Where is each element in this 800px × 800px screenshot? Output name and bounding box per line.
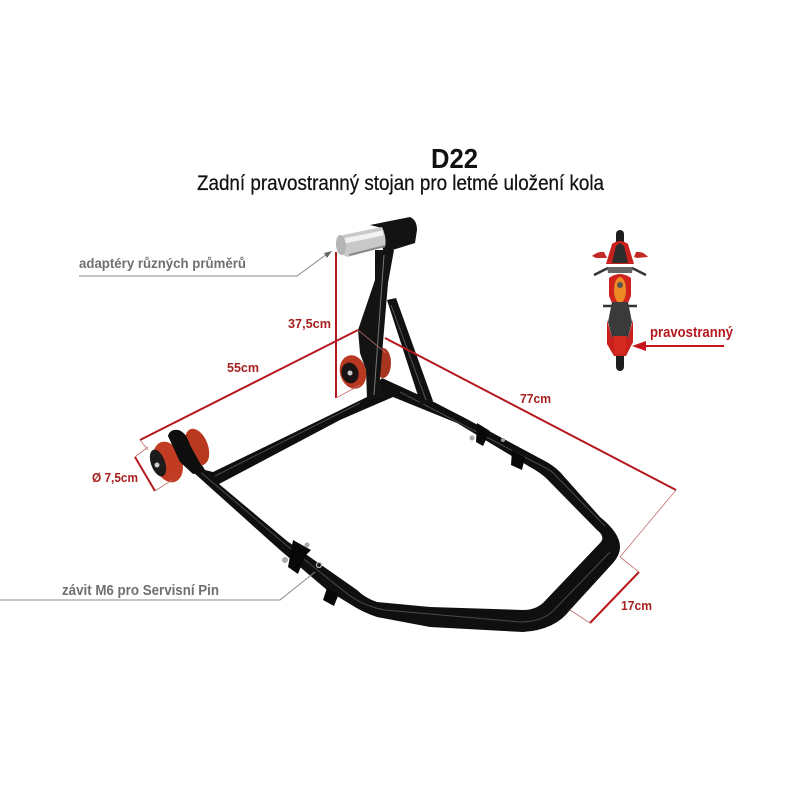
dimension: 17cm — [570, 557, 652, 623]
dimension: wheel diameter 7,5cm: Ø 7,5cm — [92, 471, 138, 485]
axle holder cylinder — [370, 217, 417, 253]
dimension: height 37,5cm — [288, 252, 360, 398]
dimension: length 77cm: 77cm — [520, 392, 551, 406]
callout: adapters — [79, 251, 332, 276]
upright post and strut — [358, 250, 433, 405]
dimension: width 55cm — [140, 330, 386, 450]
callout: M6 thread — [0, 572, 315, 600]
stand product image — [147, 217, 620, 632]
callout: M6 thread: závit M6 pro Servisní Pin — [62, 582, 219, 599]
callout: right-side label and arrow — [632, 324, 734, 351]
icon: motorcycle top view — [592, 230, 648, 371]
callout: right-side label and arrow: pravostranný — [650, 324, 734, 341]
subtitle: Zadní pravostranný stojan pro letmé uložení kola — [197, 172, 604, 195]
dimension: height 37,5cm: 37,5cm — [288, 317, 331, 331]
title: product code: D22 — [431, 143, 478, 174]
base frame tube — [168, 378, 620, 632]
clamps and bolts — [282, 423, 525, 606]
callout: adapters: adaptéry různých průměrů — [79, 256, 246, 271]
dimension: wheel diameter 7,5cm — [92, 447, 172, 491]
dimension: width 55cm: 55cm — [227, 361, 259, 375]
dimension: 17cm: 17cm — [621, 599, 652, 613]
silver adapter — [335, 227, 386, 257]
rear small wheels — [336, 348, 391, 392]
front wheels — [147, 425, 214, 487]
dimension: length 77cm — [385, 338, 676, 557]
